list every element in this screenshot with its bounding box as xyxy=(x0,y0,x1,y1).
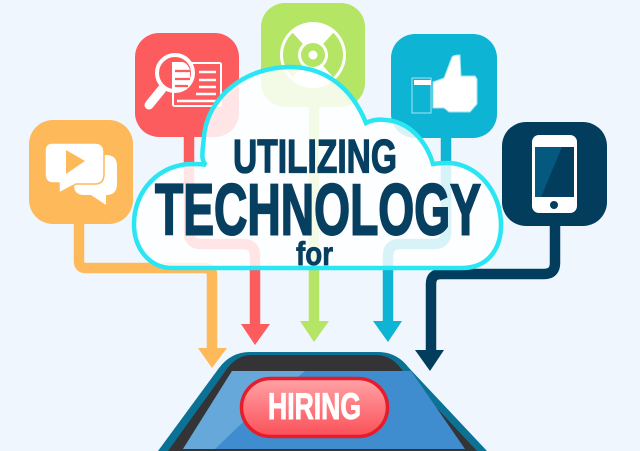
icon: smartphone xyxy=(532,135,577,213)
button: hiring: HIRING xyxy=(268,386,361,427)
arrow: green connector to tablet xyxy=(300,105,329,342)
icon: thumbs up xyxy=(412,55,477,113)
icon: magnifier over document xyxy=(149,55,221,106)
cloud xyxy=(134,67,501,268)
arrow: red connector to tablet xyxy=(189,135,270,345)
icon tile: green disc xyxy=(261,3,365,107)
title: for: for xyxy=(296,235,333,272)
arrow: teal connector to tablet xyxy=(373,135,446,342)
arrow: orange connector to tablet xyxy=(79,220,227,368)
tablet screen xyxy=(183,371,465,449)
arrow: navy connector to tablet xyxy=(415,222,555,371)
icon tile: teal thumbs up xyxy=(391,34,497,138)
icon tile: orange video chat xyxy=(29,120,133,224)
icon tile: navy smartphone xyxy=(502,122,607,226)
icon: compact disc xyxy=(280,22,346,88)
icon tile: red document search xyxy=(135,33,239,137)
title: utilizing: UTILIZING xyxy=(233,130,397,182)
icon: chat bubbles with play button xyxy=(45,143,117,205)
tablet xyxy=(158,352,487,451)
button: hiring xyxy=(242,378,388,436)
